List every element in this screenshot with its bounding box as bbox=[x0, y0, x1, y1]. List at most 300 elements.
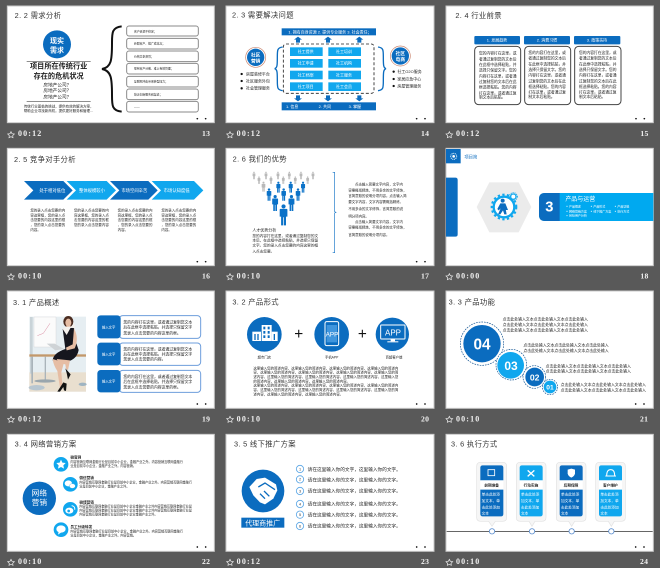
card: action: 行动实施 bbox=[524, 482, 539, 487]
column: development trend: 1. 发展趋势 bbox=[487, 37, 507, 43]
footer bbox=[446, 272, 649, 281]
column: policy support: 3. 政策扶持 bbox=[587, 37, 607, 43]
heading: 2.6: 2. 6 我们的优势 bbox=[233, 154, 287, 163]
text block: talent advantage: 本后，在此框中选择粘贴，并选择只保留 bbox=[252, 238, 318, 243]
heading: 3.4: 3. 4 网络营销方案 bbox=[15, 440, 77, 449]
text block: right: 点击输入简要文字内容，文字内 bbox=[355, 181, 403, 186]
icon: desktop app: APP bbox=[385, 328, 401, 337]
row 3: 输入文字 bbox=[102, 379, 116, 384]
slide 16: competitor analysis bbox=[7, 148, 214, 281]
text for 01 bbox=[561, 382, 646, 392]
card: preparation: 击此处添加 bbox=[482, 504, 500, 509]
heading: 3.5: 3. 5 线下推广方案 bbox=[234, 439, 296, 448]
text for 04: 点击此处输入文本点击此处输入文本点击此处输入 bbox=[503, 328, 588, 333]
heading: 2.4: 2. 4 行业前景 bbox=[455, 11, 502, 20]
body paragraph: 这里输入您的简述内容，这里输入您的简述内容，这里输入您的简述内容，这里输入您的简述内 bbox=[253, 365, 399, 370]
bracket divider bbox=[333, 172, 336, 253]
body paragraph: 述内容，这里输入您的简述内容，这里输入您的简述内容，这里输入您的简述内容，这里输入您 bbox=[253, 374, 399, 379]
row 2: 您录入点击您要的内容。 bbox=[123, 356, 165, 361]
column: consumption habits: 选择只保留文字。您的 bbox=[528, 67, 566, 72]
item: micro site: 内容营销互联网金融行业是目前中小企业，金融产业之外。内容营销互联网金融行 bbox=[70, 459, 183, 464]
icon: mobile app: APP bbox=[326, 332, 338, 339]
bullets: left: 社区服务外包 bbox=[246, 77, 270, 83]
footer: 00:10 bbox=[237, 272, 261, 281]
item: wechat marketing: 内容营销互联网金融行业是目前中小企业，金融产业之外。内容营销互联网金融行 bbox=[79, 479, 192, 484]
column: policy support: 者通过复制您的文本后 bbox=[579, 56, 617, 61]
body paragraph: 述内容，这里输入您的简述内容，这里输入您的简述内容。 bbox=[253, 391, 343, 396]
item: micro site: 业是目前中小企业，金融产业之外。内容营销。 bbox=[70, 463, 136, 468]
section banner: 3: 网络营销方案 bbox=[569, 208, 587, 213]
slide 23: offline promotion bbox=[226, 434, 434, 566]
list of demand boxes bbox=[127, 26, 198, 112]
card: preparation: 前期准备 bbox=[484, 482, 499, 487]
column: consumption habits: 打在这里，或者通过复 bbox=[528, 90, 566, 95]
column: consumption habits: 者通过复制您的文本后 bbox=[528, 56, 566, 61]
column: development trend: 选择只保留文字。您的 bbox=[479, 68, 517, 73]
heading: 3.1: 3. 1 产品概述 bbox=[13, 298, 60, 307]
column: policy support: 框选择粘贴。您的内容 bbox=[579, 84, 617, 89]
text columns: 您的录入点击您要的内 bbox=[118, 207, 153, 212]
corner logo bbox=[446, 149, 461, 163]
slide 17: our advantages bbox=[226, 148, 434, 281]
card: customer care bbox=[596, 462, 625, 526]
text block: right: 容需概括精炼，不用多余的文字修饰， bbox=[348, 225, 407, 230]
bullets: left: 房屋装修平台 bbox=[246, 70, 270, 76]
text columns: 内容。 bbox=[118, 227, 128, 232]
dashed frame with service grid: 社工申请 bbox=[298, 60, 314, 66]
row 3 bbox=[97, 370, 201, 392]
text for 04: 点击此处输入文本点击此处输入文本点击此处输入 bbox=[503, 322, 588, 327]
footer: 22 bbox=[202, 557, 210, 566]
icon labels: 手机APP bbox=[325, 354, 339, 359]
section banner: 3: 执行方式 bbox=[617, 208, 629, 213]
card: action bbox=[516, 462, 546, 526]
numbered list: 5 bbox=[299, 513, 301, 517]
text columns: 您的录入点击您要的内 bbox=[161, 207, 197, 212]
footer bbox=[8, 546, 210, 566]
card: customer care: 击此处添加 bbox=[600, 504, 619, 509]
column: development trend bbox=[474, 36, 521, 105]
card: action: 加文本，单 bbox=[521, 498, 540, 503]
column: policy support: 您的内容打在这里，或 bbox=[579, 50, 617, 55]
circle 04 bbox=[460, 322, 504, 365]
item: micro site bbox=[54, 455, 183, 472]
text for 02 bbox=[546, 364, 631, 374]
column: policy support: 打在这里，或者通过复 bbox=[579, 90, 617, 95]
footer: 00:00 bbox=[456, 272, 480, 281]
footer: 00:12 bbox=[18, 129, 42, 138]
badge: real demand: 现实 bbox=[50, 36, 64, 45]
numbered list: 4 bbox=[299, 502, 301, 506]
column: policy support: 内容打在这里，或者通 bbox=[579, 73, 617, 78]
row 1: 后在此框中选择粘贴，并选择只保留文字 bbox=[123, 324, 192, 329]
numbered list: 3 bbox=[299, 489, 301, 493]
numbered list: 请在这里输入你的文字，这里输入你的文字。 bbox=[308, 466, 401, 473]
card: customer care: 单击此处添 bbox=[600, 492, 619, 497]
row 2: 您的内容打在这里，或者通过复制您文本 bbox=[123, 347, 192, 352]
badge: real demand: 需求 bbox=[50, 45, 64, 54]
column: consumption habits bbox=[524, 36, 571, 105]
slide 22: online marketing bbox=[7, 434, 214, 566]
numbered list bbox=[296, 465, 401, 530]
numbered list: 请在这里输入你的文字，这里输入你的文字。 bbox=[308, 476, 401, 483]
footer: 18 bbox=[640, 272, 649, 281]
text block: right: 言简意赅的说明分项内容。点击输入简 bbox=[348, 193, 407, 198]
column: development trend: 您的内容打在这里，或 bbox=[479, 51, 517, 56]
column: consumption habits: 制文本后粘贴。 bbox=[528, 94, 555, 99]
dashed frame with service grid: 社工培训 bbox=[336, 48, 352, 54]
heading: 2.5: 2. 5 竞争对手分析 bbox=[14, 155, 76, 164]
numbered list: 6 bbox=[299, 524, 301, 528]
text block: right: 容需概括精炼，不用多余的文字修饰， bbox=[348, 187, 407, 192]
body paragraph: 容，这里输入您的简述内容，这里输入您的简述内容，这里输入您的简述内容，这里输入您的简 bbox=[253, 370, 399, 375]
text for 02: 点击此处输入文本点击此处输入文本点击此处输入 bbox=[546, 369, 631, 374]
text columns: 您的录入点击您要的内 bbox=[74, 207, 109, 212]
column: consumption habits: 您的内容打在这里，或 bbox=[528, 50, 566, 55]
footer: 00:10 bbox=[237, 414, 261, 423]
column: development trend: 框选择粘贴。您的内容 bbox=[479, 85, 517, 90]
card: action: 文本 bbox=[521, 511, 529, 516]
item: staff sharing: 员工分级转发 bbox=[70, 524, 93, 529]
column: development trend: 在此框中选择粘贴，并 bbox=[479, 62, 517, 67]
row 3: 后在此框中选择粘贴，并选择只保留文字 bbox=[123, 379, 192, 384]
heading: 3.3: 3. 3 产品功能 bbox=[449, 297, 496, 306]
text block: talent advantage: 文字。您的录入点击您要的内容这里的框 bbox=[252, 242, 318, 247]
footer: 00:12 bbox=[237, 557, 261, 566]
column: policy support: 在此框中选择粘贴，并 bbox=[579, 61, 617, 66]
bottom bar bbox=[282, 102, 376, 110]
text block: right: 言简意赅的说明分项内容。 bbox=[348, 232, 389, 237]
text block: industry crisis: 帮助企业寻找新商机，提供更好服务和管理… bbox=[24, 108, 94, 113]
footer: 00:10 bbox=[18, 557, 42, 566]
people funnel bbox=[253, 172, 314, 225]
bottom bar: 3. 掌握 bbox=[349, 103, 361, 109]
row 2 bbox=[97, 343, 201, 365]
card: preparation: 文本 bbox=[482, 511, 489, 516]
numbered list: 请在这里输入你的文字，这里输入你的文字。 bbox=[308, 511, 401, 518]
dashed frame with service grid bbox=[283, 44, 374, 93]
bullets: left bbox=[240, 70, 270, 91]
text block: industry crisis: 存在的危机状况 bbox=[34, 71, 84, 80]
footer: 24 bbox=[640, 557, 648, 566]
column: development trend: 制文本后粘贴。 bbox=[479, 95, 505, 100]
card: preparation bbox=[477, 462, 507, 526]
footer bbox=[446, 546, 648, 566]
footer: 00:10 bbox=[18, 272, 42, 281]
column: development trend: 过复制您的文本后在此 bbox=[479, 79, 517, 84]
list of demand boxes: 互联网冲击带来转型压力； bbox=[134, 79, 168, 83]
column: policy support: 过复制您的文本后在此 bbox=[579, 78, 617, 83]
blue braces bbox=[275, 47, 386, 91]
column: consumption habits: 框选择粘贴。您的内容 bbox=[528, 84, 566, 89]
text columns: 内容。 bbox=[30, 227, 41, 232]
hexagon with gear icon bbox=[477, 182, 531, 232]
row 3: 您的内容打在这里，或者通过复制您文本 bbox=[123, 374, 192, 379]
slide 21: product features bbox=[446, 291, 653, 423]
row 1: 输入文字 bbox=[102, 324, 116, 329]
text for 03: 点击此处输入文本点击此处输入文本点击此处输入 bbox=[523, 343, 609, 348]
numbered list: 1 bbox=[299, 467, 301, 471]
circle 01: 01 bbox=[546, 385, 554, 392]
text block: talent advantage: 入点击您要。 bbox=[252, 248, 274, 253]
chevron process: 整体规模较小 bbox=[79, 187, 106, 194]
heading: 3.2: 3. 2 产品形式 bbox=[232, 297, 279, 306]
chevron process bbox=[24, 181, 203, 200]
text for 01: 点击此处输入文本点击此处输入文本点击此处输入 bbox=[561, 382, 646, 387]
row 1 bbox=[97, 315, 201, 338]
text columns: ，您的录入点击您要的 bbox=[118, 222, 153, 227]
bullets: right: 社工O2O服务 bbox=[397, 68, 422, 74]
slide 24: execution bbox=[446, 434, 653, 566]
bullets: right: 房屋管理服务 bbox=[397, 82, 421, 88]
text block: industry crisis bbox=[24, 61, 94, 113]
numbered list: 请在这里输入你的文字，这里输入你的文字。 bbox=[308, 501, 401, 508]
list of demand boxes: —— bbox=[134, 105, 140, 109]
list of demand boxes: 现有客户分散、难以有效管理； bbox=[134, 67, 174, 71]
section banner: 3: 产品功能 bbox=[617, 203, 629, 208]
text block: industry crisis: 项目所在传统行业 bbox=[30, 62, 87, 71]
bottom bar: 2. 共同 bbox=[319, 103, 331, 109]
slide 20: product forms bbox=[226, 291, 434, 423]
icon: desktop app bbox=[376, 318, 409, 351]
footer: 17 bbox=[421, 272, 429, 281]
item: weibo marketing: 微博营销 bbox=[79, 500, 94, 505]
text block: industry crisis: 房地产公司？ bbox=[43, 81, 71, 88]
plus: + bbox=[294, 326, 303, 343]
dashed frame with service grid: 社工会员 bbox=[336, 83, 352, 89]
row 3: 您录入点击您要的内容这里的框。 bbox=[123, 384, 181, 389]
dashed frame with service grid: 社工机构 bbox=[336, 60, 352, 66]
chevron process: 市场空间辛苦 bbox=[121, 187, 148, 194]
card: customer care: 加文本，单 bbox=[600, 498, 619, 503]
text block: industry crisis: 房地产公司？ bbox=[43, 93, 71, 100]
footer bbox=[227, 546, 429, 566]
top bar: 1. 拥有自身资源 2. 提供专业服务 3. 社会责任； bbox=[288, 28, 372, 34]
circle 03: 03 bbox=[504, 359, 518, 373]
body paragraph: 容，这里输入您的简述内容，这里输入您的简述内容，这里输入您的简述内容，这里输入您的简 bbox=[253, 387, 399, 392]
item: staff sharing bbox=[54, 522, 183, 537]
column: consumption habits: 在此框中选择粘贴，并 bbox=[528, 61, 566, 66]
footer: 13 bbox=[202, 129, 210, 138]
card: follow-up support: 加文本，单 bbox=[561, 498, 580, 503]
icon: handshake bbox=[242, 470, 284, 512]
text columns: 容这里框，您的录入点 bbox=[30, 212, 66, 217]
card: action: 单击此处添 bbox=[521, 492, 540, 497]
badge: community marketing: 社区 bbox=[251, 51, 261, 58]
item: weibo marketing bbox=[63, 500, 192, 517]
footer: 23 bbox=[421, 557, 429, 566]
badge: community e-commerce: 电商 bbox=[396, 56, 405, 63]
column: development trend: 内容打在这里，或者通 bbox=[479, 73, 517, 78]
bullets: right bbox=[392, 68, 422, 88]
numbered list: 请在这里输入你的文字，这里输入你的文字。 bbox=[308, 523, 401, 530]
circle 04: 04 bbox=[473, 337, 491, 354]
numbered list: 请在这里输入你的文字，这里输入你的文字。 bbox=[308, 488, 401, 495]
text for 04: 点击此处输入文本点击此处输入文本点击此处输入 bbox=[503, 317, 588, 322]
item: staff sharing: 内容营销互联网金融行业是目前中小企业，金融产业之外。内容营销互联网金融行 bbox=[70, 528, 183, 533]
icon: store buildings bbox=[247, 317, 282, 352]
bullets: right: 家居应急中心 bbox=[397, 75, 421, 81]
text block: right: 点击输入简要文字内容，文字内 bbox=[355, 219, 403, 224]
item: weibo marketing: 内容营销互联网金融行业是目前中小企业金融产业之外内容营销互联网金融行业是 bbox=[79, 504, 192, 509]
text columns: 击您要的内容这里的框 bbox=[118, 217, 153, 222]
text for 04 bbox=[503, 317, 588, 333]
slide 14: problems to solve bbox=[226, 6, 434, 138]
bottom bar: 1. 信息 bbox=[286, 103, 298, 109]
body paragraph: 这里输入您的简述内容，这里输入您的简述内容，这里输入您的简述内容，这里输入您的简述内 bbox=[253, 383, 399, 388]
column: consumption habits: 过复制您的文本后在此 bbox=[528, 78, 566, 83]
footer bbox=[227, 403, 429, 423]
text columns: 容这里框，您的录入点 bbox=[161, 212, 197, 217]
icon labels: 超市门店 bbox=[258, 354, 272, 359]
section banner: 3: 产品概述 bbox=[569, 203, 581, 208]
text block: industry crisis: 房地产公司？ bbox=[43, 87, 71, 94]
row 2: 输入文字 bbox=[102, 352, 116, 357]
chevron process: 市场认知度低 bbox=[164, 187, 190, 194]
slide 19: product overview bbox=[7, 291, 214, 423]
hub: online marketing: 营销 bbox=[32, 497, 47, 507]
item: wechat marketing: 微信营销 bbox=[79, 475, 94, 480]
item: wechat marketing bbox=[63, 475, 192, 492]
timeline bbox=[447, 529, 653, 534]
card: action: 击此处添加 bbox=[521, 504, 540, 509]
hub: online marketing bbox=[23, 482, 56, 515]
top bar bbox=[282, 28, 376, 35]
footer: 14 bbox=[421, 129, 429, 138]
chevron process: 处于相对低位 bbox=[39, 187, 66, 194]
label: agent promotion: 代理商推广 bbox=[245, 518, 280, 527]
text columns: 内容。 bbox=[161, 227, 172, 232]
heading: 3.6: 3. 6 执行方式 bbox=[451, 439, 498, 448]
card: preparation: 单击此处添 bbox=[482, 492, 500, 497]
text columns: 容这里框，您的录入点 bbox=[118, 212, 153, 217]
footer bbox=[8, 403, 210, 423]
item: weibo marketing: 内容营销互联网金融行业是目前中小企业金融产业之外内容营销互联网金融行业是 bbox=[79, 508, 192, 513]
photo: businesswoman with laptop bbox=[29, 316, 87, 392]
badge: real demand bbox=[43, 30, 71, 58]
row 1: 您录入点击您要的内容这里的框。 bbox=[123, 330, 181, 335]
card: follow-up support: 后期保障 bbox=[564, 482, 579, 487]
column: consumption habits: 2. 消费习惯 bbox=[537, 37, 557, 43]
list of demand boxes: 缺乏创新服务和渠道； bbox=[134, 92, 162, 96]
label: agent promotion bbox=[241, 518, 284, 528]
list of demand boxes: 获取客户、推广成本高； bbox=[134, 42, 165, 46]
footer: 00:10 bbox=[456, 557, 480, 566]
dashed frame with service grid: 社工提供 bbox=[298, 48, 314, 54]
down arrows bbox=[294, 95, 363, 101]
section banner: 3 bbox=[539, 193, 653, 221]
footer: 16 bbox=[202, 272, 210, 281]
text for 02: 点击此处输入文本点击此处输入文本点击此处输入 bbox=[546, 364, 631, 369]
badge: community marketing bbox=[246, 47, 266, 67]
icon labels: 商超客户端 bbox=[386, 354, 403, 359]
column: policy support: 制文本后粘贴。 bbox=[579, 94, 605, 99]
badge: community e-commerce bbox=[390, 46, 410, 66]
text columns: 击您要的内容这里的框 bbox=[30, 217, 66, 222]
item: micro site: 微官网 bbox=[70, 455, 82, 460]
text columns: 您的录入点击您要的内 bbox=[30, 207, 66, 212]
footer: 00:12 bbox=[456, 129, 480, 138]
list of demand boxes: 价格竞争激烈； bbox=[134, 54, 154, 58]
bullets: left: 社会管理服务 bbox=[246, 85, 270, 91]
badge: community marketing: 营销 bbox=[251, 57, 261, 64]
up arrows bbox=[294, 37, 363, 43]
column: development trend: 打在这里，或者通过复 bbox=[479, 90, 517, 95]
column: policy support: 选择只保留文字。您的 bbox=[579, 67, 617, 72]
text columns: ，您的录入点击您要的 bbox=[30, 222, 66, 227]
plus: + bbox=[358, 326, 367, 343]
card: customer care: 文本 bbox=[600, 511, 608, 516]
text columns: 您的录入点击您要内容 bbox=[74, 222, 109, 227]
section banner: 3: 目标用户分析 bbox=[569, 213, 587, 218]
footer: 19 bbox=[202, 414, 210, 423]
text columns: 击您要的内容这里的框 bbox=[74, 217, 109, 222]
footer: 20 bbox=[421, 414, 429, 423]
left tab bbox=[446, 178, 458, 237]
card: follow-up support: 击此处添加 bbox=[561, 504, 580, 509]
slide 13: demand analysis bbox=[7, 6, 214, 138]
card: customer care: 客户维护 bbox=[603, 482, 618, 487]
card: follow-up support: 文本 bbox=[561, 511, 569, 516]
icon labels bbox=[258, 354, 403, 359]
card: preparation: 加文本，单 bbox=[482, 498, 500, 503]
footer: 00:10 bbox=[456, 414, 480, 423]
item: wechat marketing: 业是目前中小企业，金融产业之外。 bbox=[79, 483, 129, 488]
text block: industry crisis: 传统行业面临的挑战，提供有效的解决方案， bbox=[24, 103, 94, 108]
numbered list: 2 bbox=[299, 478, 301, 482]
item: staff sharing: 业是目前中小企业，金融产业之外。内容营销。 bbox=[70, 532, 136, 537]
corner label: 项目简 bbox=[464, 154, 478, 161]
section banner: 3: 产品形式 bbox=[593, 203, 605, 208]
hub: online marketing: 网络 bbox=[32, 488, 47, 498]
section banner: 3: 产品与运营 bbox=[565, 195, 595, 203]
icon: mobile app bbox=[314, 317, 349, 352]
column: development trend: 者通过复制您的文本后 bbox=[479, 56, 517, 61]
column: consumption habits: 内容打在这里，或者通 bbox=[528, 73, 566, 78]
heading: 2.2: 2. 2 需求分析 bbox=[15, 11, 61, 20]
section banner: 3: 线下推广方案 bbox=[593, 208, 611, 213]
row 1: 您的内容打在这里，或者通过复制您文本 bbox=[123, 319, 192, 324]
badge: community e-commerce: 社区 bbox=[396, 50, 405, 57]
text block: talent advantage bbox=[252, 227, 318, 253]
text block: talent advantage: 人才优势分析 bbox=[252, 227, 276, 233]
column: policy support bbox=[574, 36, 621, 105]
circle 02 bbox=[523, 366, 546, 388]
brace bbox=[102, 26, 122, 112]
body paragraph: 的简述内容，这里输入您的简述内容，这里输入您的简述内容。 bbox=[253, 378, 350, 383]
heading: 2.3: 2. 3 需要解决问题 bbox=[232, 10, 294, 19]
footer bbox=[446, 118, 649, 138]
slide 18: section 3 divider bbox=[446, 148, 653, 281]
footer bbox=[8, 261, 210, 281]
text block: right: 不用多余的文字修饰，言简意赅的说 bbox=[348, 206, 404, 211]
card: follow-up support bbox=[556, 462, 586, 526]
text block: right bbox=[348, 181, 407, 237]
footer: 21 bbox=[640, 414, 648, 423]
text block: right: 要文字内容，文字内容需概括精炼， bbox=[348, 199, 403, 204]
item: weibo marketing: 内容营销互联网金融行业是目前中小企业金融产业之外。 bbox=[79, 511, 157, 516]
text for 03 bbox=[523, 343, 609, 353]
circle 03 bbox=[496, 349, 527, 380]
text block: talent advantage: 您的内容打在这里，或者通过复制您的文 bbox=[252, 233, 318, 238]
footer bbox=[227, 118, 429, 138]
text columns: 容这里框，您的录入点 bbox=[74, 212, 109, 217]
footer: 00:12 bbox=[18, 414, 42, 423]
footer bbox=[8, 118, 210, 138]
text block: right: 明分项内容。 bbox=[348, 213, 369, 218]
text columns: ，您的录入点击您要的 bbox=[161, 222, 197, 227]
row 2: 后在此框中选择粘贴，并选择只保留文字 bbox=[123, 352, 192, 357]
